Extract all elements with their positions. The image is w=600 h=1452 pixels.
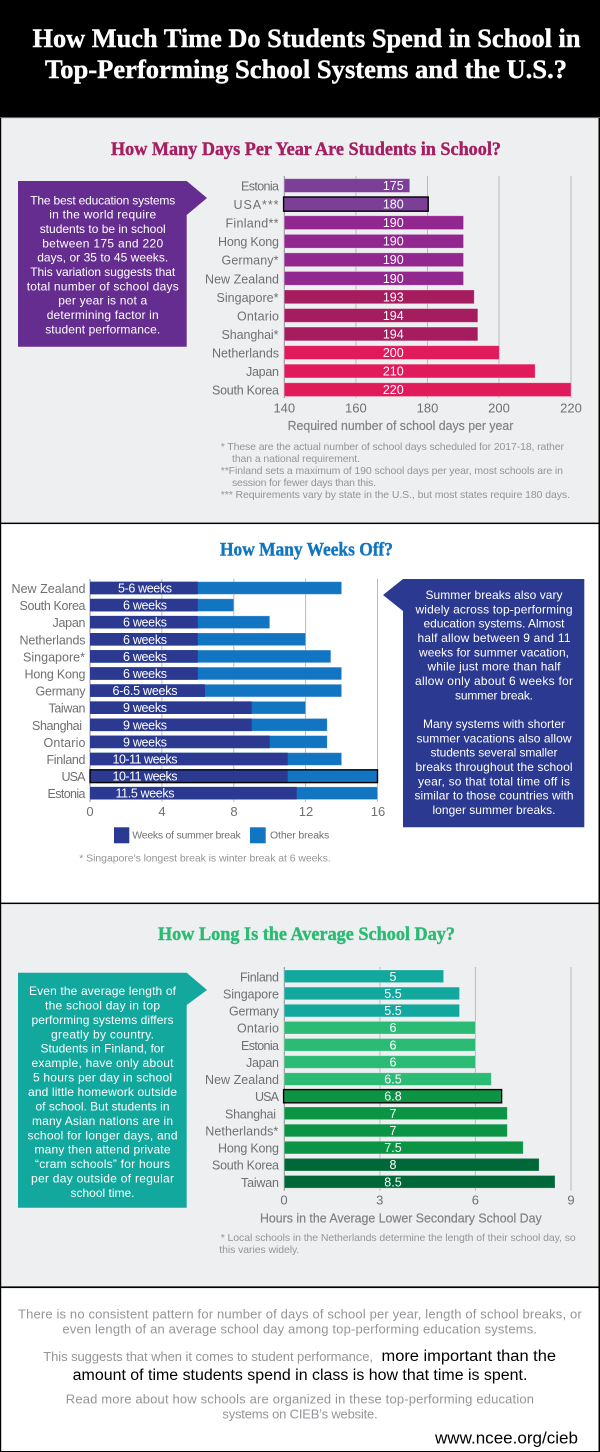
text: key takeaway: amount of time students spend in class is how that time is spent.: [73, 1367, 527, 1384]
footnotes: days per year: **Finland sets a maximum of 190 school days per year, most schools are in: [221, 465, 563, 477]
bar: Germany: [222, 253, 464, 268]
bar: Singapore: Singapore: [223, 987, 279, 1001]
bar: Ontario: [44, 735, 327, 750]
bar: Singapore: Singapore*: [23, 650, 85, 664]
text: no consistent pattern: There is no consistent pattern for number of days of school per year, length of school breaks, or: [18, 1306, 582, 1321]
bar: Singapore: 5.5: [384, 987, 402, 1001]
bar: Estonia: Estonia: [48, 787, 86, 801]
x axis ticks: hours: [280, 1192, 575, 1207]
footnotes: days per year: session for fewer days than this.: [232, 477, 376, 489]
text: no consistent pattern: [18, 1306, 582, 1336]
bar: Finland: Finland**: [226, 217, 279, 231]
callout: weeks off: year, so that total time off is: [418, 774, 570, 788]
callout: school day length: example, have only about: [32, 1056, 174, 1070]
bar: Japan: 6: [390, 1056, 397, 1070]
bar: Estonia: [241, 179, 410, 194]
bar: South Korea: 6 weeks: [123, 599, 167, 613]
heading: school day length: How Long Is the Average School Day?: [158, 925, 455, 945]
bar: Germany: [229, 1004, 460, 1019]
callout: days per year: in the world require: [49, 208, 157, 222]
bar: Shanghai: Shanghai: [225, 1107, 276, 1121]
bar: Estonia: 6: [390, 1038, 397, 1052]
footnotes: days per year: * These are the actual number of school days scheduled for 2017-18, rather: [221, 441, 564, 453]
bar: Singapore: 193: [383, 290, 404, 304]
callout: school day length: the school day in top: [45, 998, 160, 1012]
callout: weeks off: summer vacations also allow: [416, 731, 572, 745]
bar: Finland: 10-11 weeks: [112, 752, 178, 766]
title banner: [0, 0, 600, 118]
footnote: Netherlands: * Local schools in the Netherlands determine the length of their school day, so: [221, 1232, 576, 1244]
bar: Singapore: [216, 290, 474, 305]
bar: South Korea: [212, 383, 571, 398]
callout: weeks off: Summer breaks also vary: [426, 588, 562, 602]
bar: Japan: Japan: [246, 365, 279, 379]
bar: Japan: Japan: [246, 1056, 279, 1070]
bar: South Korea: 8: [390, 1158, 397, 1172]
bar: Hong Kong: Hong Kong: [218, 235, 279, 249]
callout: weeks off: widely across top-performing: [414, 602, 572, 616]
bar: New Zealand: 6.5: [384, 1073, 402, 1087]
bar: Netherlands: 6 weeks: [123, 633, 167, 647]
text: key takeaway: [43, 1348, 556, 1384]
bar: South Korea: [20, 599, 234, 613]
bar: Hong Kong: [218, 234, 464, 249]
bar: Netherlands: Netherlands*: [205, 1124, 278, 1138]
bar: Hong Kong: Hong Kong: [24, 668, 86, 682]
bar: Hong Kong: 6 weeks: [123, 667, 167, 681]
bar: Finland: 5: [390, 970, 397, 984]
footnote: Netherlands: [219, 1232, 576, 1256]
bar: Germany: 6-6.5 weeks: [112, 684, 178, 698]
callout: days per year: student performance.: [45, 322, 160, 336]
footnote: Singapore: * Singapore’s longest break is winter break at 6 weeks.: [79, 853, 331, 865]
panel: school day length: [0, 904, 600, 1287]
bar: Netherlands: [20, 633, 306, 647]
bar: Germany: 190: [383, 253, 404, 267]
panel: weeks off: [0, 524, 600, 903]
callout: school day length: Even the average length of: [29, 984, 177, 998]
callout: school day length: [18, 973, 207, 1208]
bar: New Zealand: 5-6 weeks: [118, 582, 172, 596]
bar: Netherlands: [205, 1124, 507, 1138]
bar: South Korea: [212, 1158, 539, 1173]
bar: Shanghai: 7: [390, 1107, 397, 1121]
bar: Taiwan: 9 weeks: [123, 701, 167, 715]
footnote: Netherlands: this varies widely.: [219, 1244, 299, 1256]
bar: Netherlands: Netherlands: [212, 346, 279, 360]
bar: New Zealand: [12, 582, 342, 596]
legend: weeks off: [114, 827, 329, 843]
bar: Germany: Germany*: [222, 254, 279, 268]
bar: Shanghai: Shanghai: [32, 719, 82, 733]
bar: Ontario: Ontario: [237, 1022, 279, 1036]
bar: Shanghai: [225, 1107, 507, 1121]
bar: Hong Kong: 190: [383, 235, 404, 249]
bar: Taiwan: Taiwan: [48, 702, 86, 716]
bar: USA: 10-11 weeks: [112, 770, 178, 784]
text: read more: Read more about how schools are organized in these top-performing education: [66, 1391, 534, 1406]
bar: Germany: 5.5: [384, 1004, 402, 1018]
bar: South Korea: South Korea: [212, 1159, 279, 1173]
x axis ticks: hours: 9: [567, 1192, 575, 1207]
text: read more: systems on CIEB’s website.: [222, 1406, 378, 1421]
bar: Shanghai: 9 weeks: [123, 718, 167, 732]
bar: New Zealand: New Zealand: [12, 582, 86, 596]
website link text: www.ncee.org/cieb: [434, 1429, 578, 1447]
bar: Estonia: 11.5 weeks: [116, 787, 174, 801]
callout: weeks off: longer summer breaks.: [432, 803, 556, 817]
bar: Singapore: Singapore*: [216, 291, 279, 305]
callout: days per year: students to be in school: [40, 222, 166, 236]
bar: Singapore: [223, 987, 460, 1001]
bar: Ontario: 9 weeks: [123, 735, 167, 749]
bar: Estonia: [241, 1038, 475, 1053]
callout: weeks off: summer break.: [455, 688, 533, 702]
text: key takeaway: This suggests that when it comes to student performance,: [43, 1349, 373, 1364]
bar: New Zealand: [205, 272, 464, 286]
x axis ticks: weeks: 8: [230, 804, 238, 819]
panel: conclusion: [0, 1288, 600, 1451]
callout: weeks off: half allow between 9 and 11: [418, 631, 571, 645]
bar: Netherlands: [212, 346, 499, 360]
bar: USA: 180: [383, 198, 404, 212]
footnotes: days per year: [221, 441, 570, 501]
bar: Estonia: Estonia: [241, 180, 279, 194]
stacked bar chart: weeks off: [12, 579, 385, 819]
bar: South Korea: South Korea: [20, 599, 86, 613]
x axis ticks: days: 200: [488, 400, 510, 415]
title banner: How Much Time Do Students Spend in School in: [32, 24, 581, 53]
bar: Japan: 6 weeks: [123, 616, 167, 630]
bar: Finland: Finland: [46, 753, 86, 767]
bar: Finland: Finland: [240, 970, 279, 984]
bar: USA: 6.8: [384, 1090, 402, 1104]
bar: Estonia: Estonia: [241, 1039, 279, 1053]
callout: days per year: [18, 181, 207, 347]
bar: South Korea: South Korea: [212, 384, 279, 398]
bar: New Zealand: New Zealand: [205, 272, 279, 286]
bar: Germany: Germany: [36, 685, 86, 699]
callout: school day length: many Asian nations are in: [32, 1114, 173, 1128]
bar: Finland: 190: [383, 216, 404, 230]
callout: days per year: This variation suggests that: [30, 265, 176, 279]
bar: Ontario: [237, 1021, 475, 1036]
bar: Shanghai: [222, 327, 478, 342]
bar: Netherlands: 200: [383, 346, 404, 360]
callout: days per year: per year is not a: [58, 294, 148, 308]
x axis ticks: hours: 6: [472, 1192, 479, 1207]
bar: Finland: [226, 216, 464, 231]
footnotes: days per year: than a national requirement.: [232, 453, 360, 465]
x axis title: hours: Hours in the Average Lower Secondary School Day: [260, 1211, 542, 1226]
bar: Estonia: 175: [383, 179, 404, 193]
panel: days per year: [0, 118, 600, 523]
bar: Netherlands: Netherlands: [20, 633, 86, 647]
bar: Estonia: [48, 787, 378, 801]
callout: school day length: many then attend private: [34, 1143, 171, 1157]
bar: Ontario: 194: [383, 309, 404, 323]
bar: Ontario: [237, 309, 478, 323]
bar: USA: [234, 197, 428, 212]
bar: Finland: [46, 752, 342, 767]
title banner: Top-Performing School Systems and the U.S.?: [45, 55, 567, 84]
bar: Taiwan: Taiwan: [241, 1176, 279, 1190]
bar: Ontario: Ontario: [237, 309, 279, 323]
bar: Japan: 210: [383, 365, 404, 379]
bar: Japan: [246, 1056, 475, 1070]
callout: school day length: of school. But students in: [36, 1099, 170, 1113]
bar: Singapore: [23, 650, 331, 664]
callout: school day length: greatly by country.: [51, 1027, 154, 1041]
bar: Japan: [246, 364, 535, 379]
x axis ticks: days: 160: [345, 400, 367, 415]
bar: Germany: [36, 684, 342, 699]
bar: Hong Kong: 7.5: [384, 1141, 402, 1155]
bar: Taiwan: 8.5: [384, 1175, 402, 1189]
x axis ticks: days: [273, 400, 582, 415]
callout: weeks off: breaks throughout the school: [416, 760, 572, 774]
bar: Ontario: Ontario: [44, 736, 86, 750]
bar chart: required school days: [205, 176, 582, 433]
callout: weeks off: [383, 579, 584, 827]
callout: school day length: “cram schools” for hours: [35, 1157, 170, 1171]
callout: weeks off: education systems. Almost: [424, 617, 565, 631]
x axis ticks: weeks: 4: [158, 804, 166, 819]
footnotes: days per year: *** Requirements vary by state in the U.S., but most states require 180 days.: [221, 489, 570, 501]
callout: weeks off: while just more than half: [426, 660, 561, 674]
legend: weeks off: Other breaks: [270, 829, 329, 841]
bar: USA: [255, 1090, 502, 1104]
callout: school day length: per day outside of regular: [31, 1172, 174, 1186]
bar: Japan: Japan: [52, 616, 86, 630]
x axis ticks: weeks: 12: [299, 804, 313, 819]
bar: Hong Kong: [24, 667, 342, 682]
bar: New Zealand: New Zealand: [205, 1073, 279, 1087]
bar: Shanghai: 194: [383, 328, 404, 342]
callout: school day length: school time.: [70, 1186, 134, 1200]
bar: New Zealand: [205, 1073, 491, 1087]
bar: Hong Kong: Hong Kong: [218, 1142, 279, 1156]
x axis title: days: Required number of school days per year: [288, 418, 514, 433]
bar: New Zealand: 190: [383, 272, 404, 286]
bar: Germany: Germany: [229, 1005, 280, 1019]
bar: Netherlands: 7: [390, 1124, 397, 1138]
text: read more: [66, 1391, 534, 1421]
bar: Singapore: 6 weeks: [123, 650, 167, 664]
legend: weeks off: Weeks of summer break: [132, 829, 241, 841]
x axis ticks: weeks: 16: [371, 804, 385, 819]
callout: school day length: performing systems differs: [32, 1013, 174, 1027]
callout: weeks off: similar to those countries with: [414, 789, 574, 803]
bar: Taiwan: [241, 1175, 555, 1190]
heading: weeks off: How Many Weeks Off?: [220, 541, 393, 561]
callout: school day length: 5 hours per day in school: [33, 1071, 172, 1085]
callout: days per year: between 175 and 220: [42, 236, 164, 250]
bar: Finland: [240, 970, 444, 984]
bar chart: hours per day: [205, 967, 575, 1226]
text: key takeaway: more important than the: [382, 1348, 556, 1365]
bar: Shanghai: [32, 718, 327, 733]
callout: school day length: Students in Finland, for: [40, 1042, 164, 1056]
callout: weeks off: students several smaller: [430, 746, 558, 760]
x axis ticks: hours: 0: [280, 1192, 288, 1207]
text: no consistent pattern: even length of an average school day among top-performing education systems.: [62, 1321, 537, 1336]
bar: Shanghai: Shanghai*: [222, 328, 279, 342]
bar: South Korea: 220: [383, 383, 404, 397]
callout: weeks off: Many systems with shorter: [423, 717, 565, 731]
callout: school day length: school for longer days, and: [28, 1128, 178, 1142]
callout: days per year: total number of school days: [27, 279, 179, 293]
x axis ticks: hours: 3: [376, 1192, 383, 1207]
bar: USA: USA: [62, 770, 86, 784]
callout: school day length: and little homework outside: [28, 1085, 177, 1099]
x axis ticks: weeks: 0: [86, 804, 94, 819]
callout: weeks off: allow only about 6 weeks for: [415, 674, 573, 688]
bar: Hong Kong: [218, 1141, 523, 1156]
bar: USA: USA***: [234, 198, 279, 212]
x axis ticks: days: 140: [273, 400, 295, 415]
callout: weeks off: weeks for summer vacation,: [418, 645, 569, 659]
bar: Taiwan: [48, 701, 306, 716]
x axis ticks: days: 180: [417, 400, 438, 415]
bar: Japan: [52, 616, 270, 630]
bar: Ontario: 6: [390, 1021, 397, 1035]
bar: USA: [62, 770, 378, 784]
callout: days per year: days, or 35 to 45 weeks.: [37, 251, 168, 265]
callout: days per year: determining factor in: [47, 308, 159, 322]
callout: days per year: The best education systems: [30, 193, 175, 207]
x axis ticks: weeks: [86, 804, 385, 819]
x axis ticks: days: 220: [560, 400, 582, 415]
heading: days per year: How Many Days Per Year Are Students in School?: [111, 140, 501, 160]
bar: USA: USA: [255, 1090, 280, 1104]
